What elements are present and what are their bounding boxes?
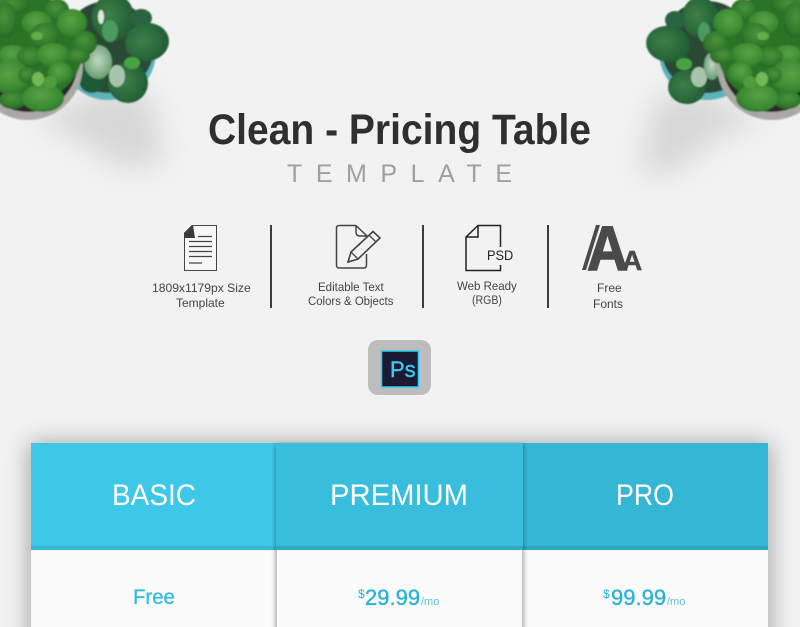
icon: Photoshop badge xyxy=(368,340,431,395)
premium column shadow xyxy=(275,444,524,627)
label: free fonts xyxy=(593,281,623,311)
label: web ready: (RGB) xyxy=(472,294,502,307)
right plants cast shadow xyxy=(640,90,765,175)
decorative plants: top left xyxy=(0,0,171,120)
label: web ready xyxy=(457,280,517,307)
feature: editable text xyxy=(308,226,394,308)
basic heading: BASIC xyxy=(112,479,196,512)
pro heading: PRO xyxy=(616,479,674,512)
icon: font letters: A xyxy=(622,245,642,276)
panel: basic plan xyxy=(31,443,277,627)
icon: font letters: A xyxy=(587,214,628,284)
premium price: 29.99 xyxy=(365,585,420,610)
decorative plants: top right xyxy=(644,0,800,120)
label: free fonts: Free xyxy=(597,281,622,295)
label: size template xyxy=(152,281,251,310)
panel: pro plan xyxy=(522,443,768,627)
premium price xyxy=(358,585,439,610)
panel: premium plan xyxy=(276,443,523,627)
pro price: $ xyxy=(603,587,610,601)
pricing table xyxy=(29,443,770,627)
icon: A4 document xyxy=(184,225,216,270)
label: size template: Template xyxy=(176,296,225,310)
premium price: /mo xyxy=(421,596,439,608)
label: editable text xyxy=(308,281,394,308)
pro price xyxy=(603,585,685,610)
title: Clean - Pricing Table xyxy=(208,106,591,154)
icon: PSD file: PSD xyxy=(487,247,514,263)
subtitle: TEMPLATE xyxy=(287,160,512,188)
table shadow xyxy=(29,443,770,627)
premium heading: PREMIUM xyxy=(330,479,468,512)
feature: web ready xyxy=(457,226,517,307)
label: web ready: Web Ready xyxy=(457,280,517,293)
pro price: 99.99 xyxy=(611,585,666,610)
label: size template: 1809x1179px Size xyxy=(152,281,251,295)
pro price: /mo xyxy=(667,596,685,608)
feature: size template xyxy=(152,225,251,310)
label: free fonts: Fonts xyxy=(593,297,623,311)
icon: Photoshop badge: Ps xyxy=(390,357,416,382)
label: editable text: Editable Text xyxy=(318,281,384,294)
label: editable text: Colors & Objects xyxy=(308,295,394,308)
basic price: Free xyxy=(133,586,175,609)
premium price: $ xyxy=(358,587,365,601)
icon: document and pencil xyxy=(336,226,380,268)
left plants cast shadow xyxy=(35,85,165,170)
feature: free fonts xyxy=(582,214,642,311)
